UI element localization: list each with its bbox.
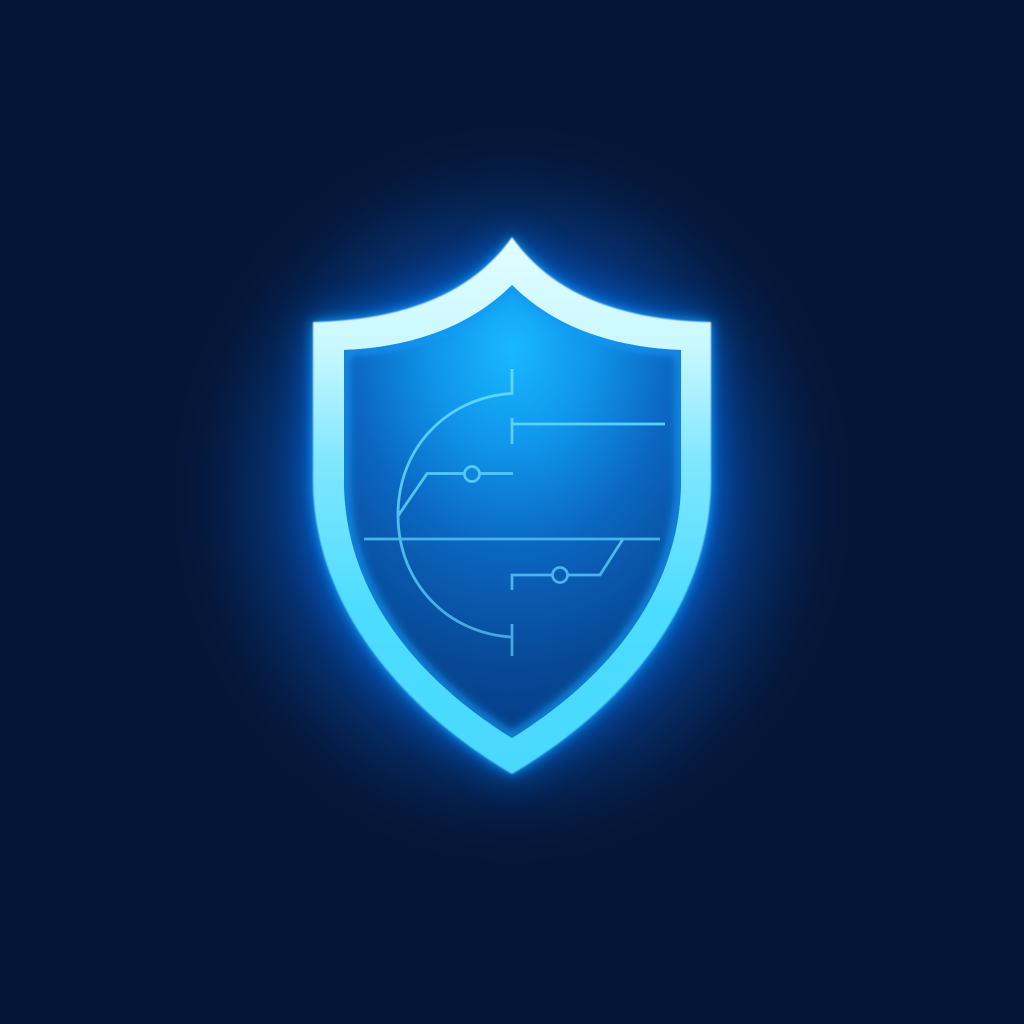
shield illustration — [202, 159, 821, 830]
circuit lines — [364, 369, 665, 656]
shield rim — [313, 237, 711, 774]
lower node trace — [512, 539, 623, 590]
horizontal axis — [364, 538, 660, 540]
arc with end ticks — [398, 369, 512, 656]
shield inner panel — [344, 285, 681, 738]
upper right trace — [512, 418, 665, 444]
shield outer glow — [313, 237, 711, 774]
upper node trace — [398, 466, 513, 516]
